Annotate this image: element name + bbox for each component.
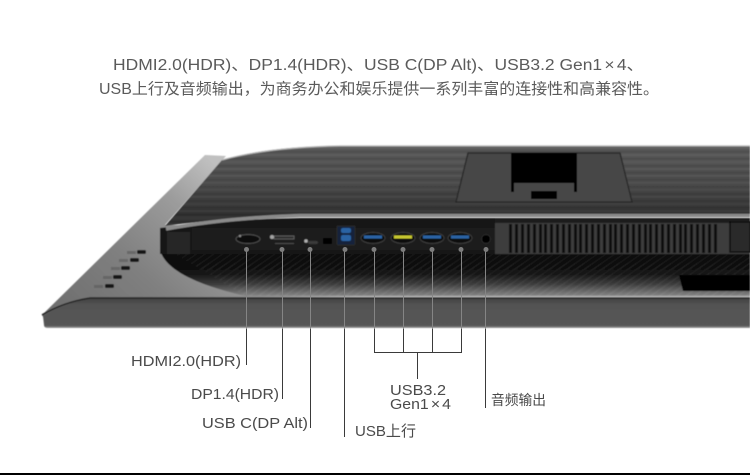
label: audio output: 音频输出 [491, 392, 546, 408]
label: USB 3.2 [390, 382, 451, 413]
shell top highlight [222, 146, 750, 160]
label: HDMI: HDMI2.0(HDR) [131, 353, 241, 370]
monitor bezel base [42, 155, 750, 322]
leader dots [244, 247, 488, 252]
rear shell [165, 146, 750, 226]
power socket [730, 222, 750, 252]
port: USB C [304, 239, 318, 244]
small slot [323, 238, 332, 244]
label: USB C: USB C(DP Alt) [202, 415, 308, 432]
port: DisplayPort [270, 235, 294, 244]
side buttons [94, 250, 146, 288]
small slot [531, 191, 557, 199]
port: USB 3.2 third [420, 232, 444, 244]
front edge strip [43, 298, 750, 328]
leader lines below monitor [246, 329, 486, 437]
port: USB 3.2 yellow [391, 232, 415, 244]
shadow mesh texture [175, 254, 750, 296]
vents [509, 224, 717, 253]
lower shadow area [160, 250, 750, 296]
label: USB 3.2: USB3.2 [390, 382, 446, 399]
bottom black rule [0, 473, 750, 475]
stand mount plate [456, 153, 632, 202]
label: USB upstream: USB上行 [355, 423, 416, 440]
label: DP: DP1.4(HDR) [191, 386, 279, 403]
heading text: HDMI2.0(HDR)、DP1.4(HDR)、USB C(DP Alt)、USB3.2 Gen1 ×4、 [113, 57, 644, 74]
black cutout [679, 275, 750, 291]
heading text: USB上行及音频输出，为商务办公和娱乐提供一系列丰富的连接性和高兼容性。 [99, 80, 659, 98]
port: USB 3.2 first [361, 232, 385, 244]
label: USB 3.2: Gen1 ×4 [390, 396, 451, 413]
stand notch [511, 153, 577, 192]
port: USB upstream [337, 226, 355, 245]
left block [167, 232, 190, 254]
port: HDMI [236, 234, 260, 244]
port plate [192, 228, 495, 250]
upper dark band [495, 218, 750, 223]
monitor rear view [42, 146, 750, 328]
port panel recess [160, 218, 495, 254]
port: USB 3.2 fourth [448, 232, 472, 244]
light ridge [166, 216, 750, 229]
vent panel [495, 218, 750, 254]
front top shadow line [42, 298, 750, 315]
shell horizontal ribs [165, 146, 750, 226]
heading text [99, 57, 659, 98]
leader lines over monitor [246, 250, 486, 330]
port: audio jack [482, 234, 490, 244]
